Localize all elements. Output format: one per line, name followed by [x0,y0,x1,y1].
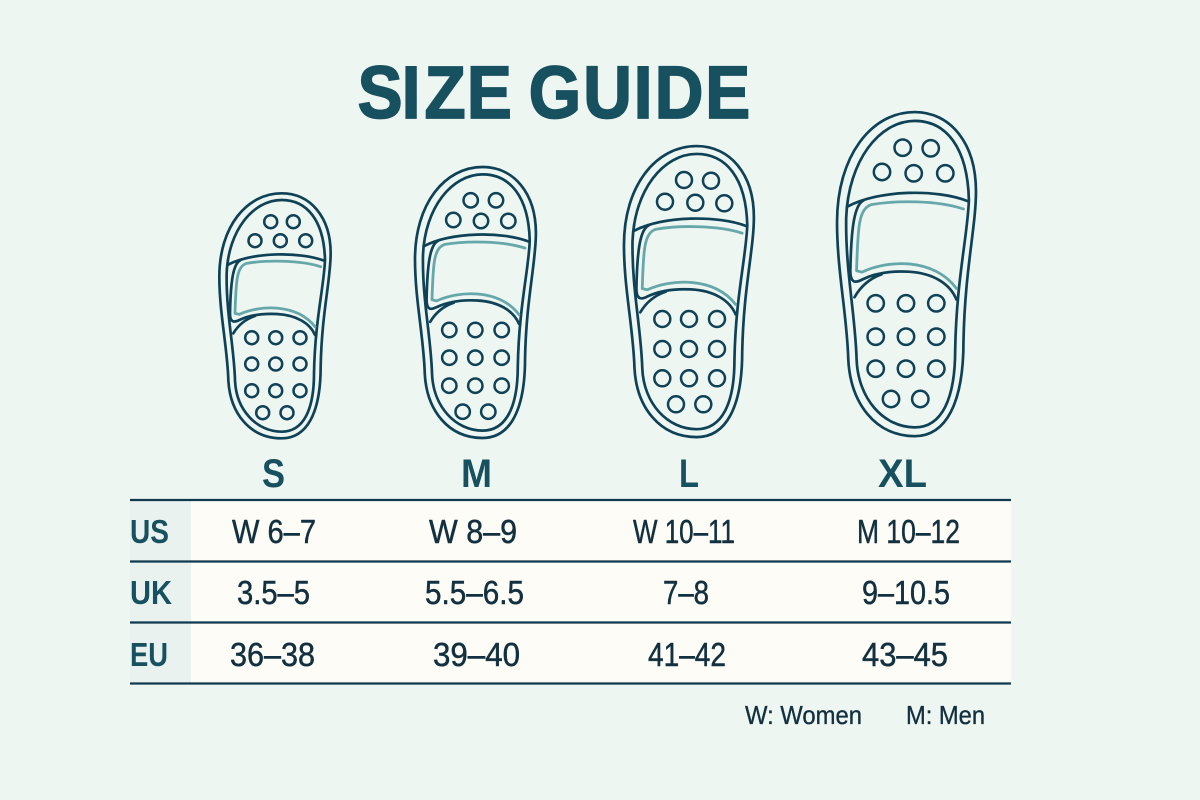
row: US: M 10–12 [857,513,960,550]
row: EU [130,636,948,673]
row: UK: UK [130,574,172,611]
title: SIZE GUIDE [358,51,750,134]
row: UK: 9–10.5 [862,574,950,611]
row: EU: EU [130,636,168,673]
row: UK: 7–8 [663,574,709,611]
row: US: US [130,513,169,550]
row: UK: 3.5–5 [237,574,310,611]
slipper: size L [624,146,754,437]
slipper: size M [415,167,536,438]
row: UK: 5.5–6.5 [425,574,524,611]
size labels: M [461,452,492,496]
row: US: W 8–9 [429,513,517,550]
row: EU: 41–42 [648,636,726,673]
row: EU: 36–38 [230,636,315,673]
size labels: S [262,452,285,496]
legend note [745,700,985,730]
legend note: M: Men [906,700,985,730]
row: EU: 43–45 [862,636,948,673]
size labels [262,452,927,496]
row: EU: 39–40 [433,636,520,673]
size labels: L [679,452,699,496]
slipper: size S [219,193,331,438]
row: US [130,513,960,550]
legend note: W: Women [745,700,862,730]
size conversion table [130,500,1011,684]
row: US: W 6–7 [232,513,316,550]
size labels: XL [878,452,927,496]
row: UK [130,574,950,611]
row: US: W 10–11 [633,513,735,550]
slipper: size XL [837,112,976,436]
